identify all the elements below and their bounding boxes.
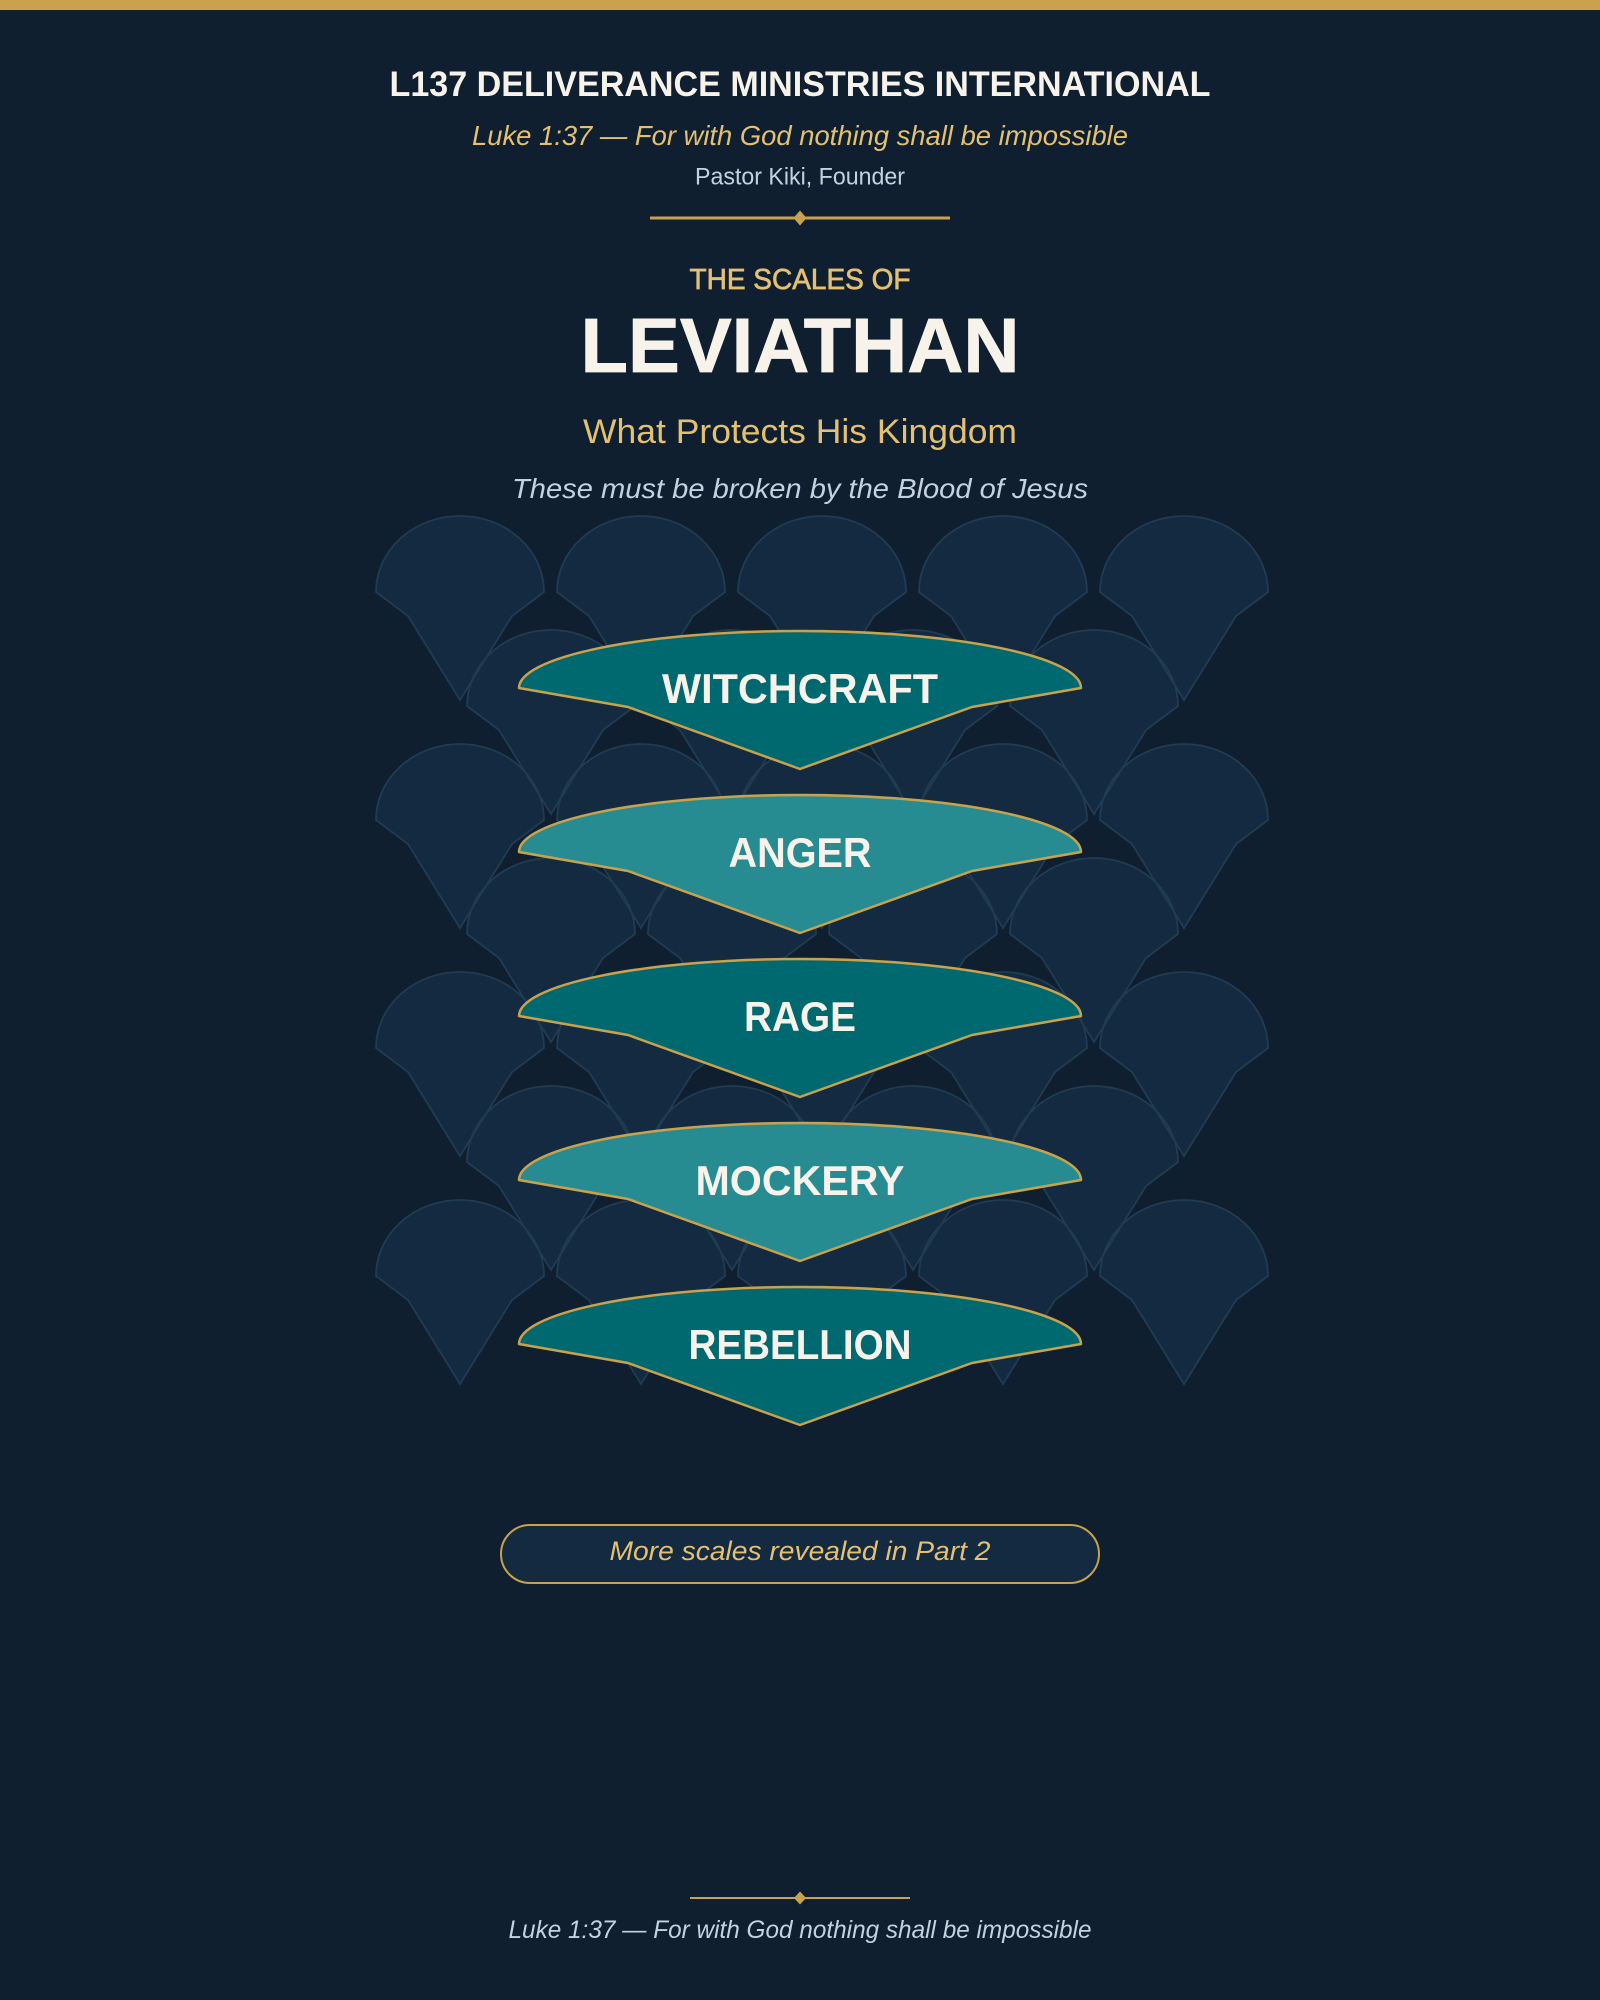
scale: rage: RAGE (744, 993, 856, 1040)
header divider with diamond (650, 210, 950, 226)
eyebrow heading: THE SCALES OF (690, 264, 910, 296)
scale: rebellion (519, 1287, 1081, 1425)
subtitle: What Protects His Kingdom (583, 413, 1017, 451)
top gold bar (0, 0, 1600, 10)
scale: witchcraft (519, 631, 1081, 769)
organisation name: L137 DELIVERANCE MINISTRIES INTERNATIONAL (390, 65, 1210, 104)
scale: mockery: MOCKERY (696, 1157, 904, 1204)
scale: anger (519, 795, 1081, 933)
footer scripture: Luke 1:37 — For with God nothing shall be impossible (508, 1916, 1092, 1944)
scale: rebellion: REBELLION (688, 1321, 912, 1368)
scale: anger: ANGER (728, 829, 872, 876)
scale: rage (519, 959, 1081, 1097)
main title: LEVIATHAN (580, 303, 1020, 389)
supporting line: These must be broken by the Blood of Jesus (512, 473, 1088, 504)
footer divider with diamond (690, 1892, 910, 1904)
scripture tagline: Luke 1:37 — For with God nothing shall be impossible (472, 120, 1128, 151)
callout pill (501, 1525, 1099, 1583)
scale: witchcraft: WITCHCRAFT (662, 665, 938, 712)
scale: mockery (519, 1123, 1081, 1261)
background scale pattern (376, 516, 1268, 1384)
callout pill: More scales revealed in Part 2 (610, 1536, 990, 1566)
founder credit: Pastor Kiki, Founder (695, 164, 905, 190)
